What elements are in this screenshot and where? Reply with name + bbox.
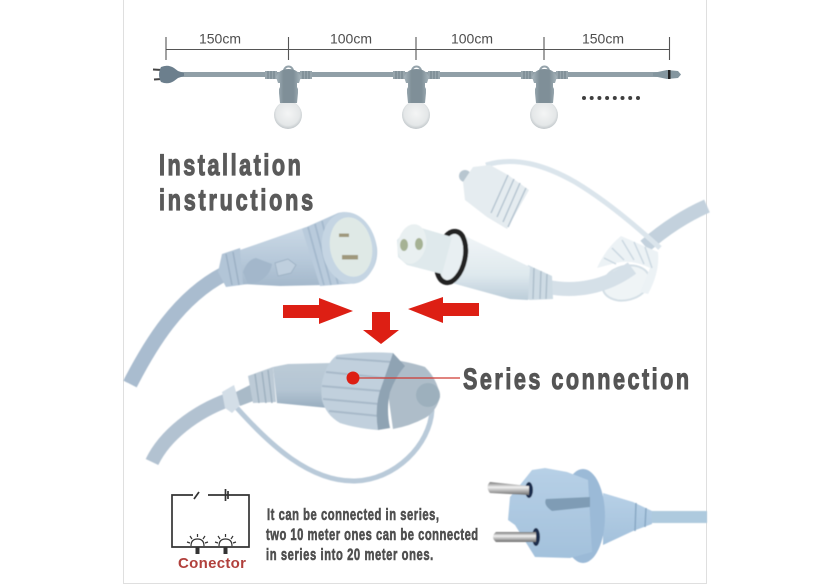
plug head bbox=[397, 225, 452, 274]
dimension lines bbox=[166, 37, 670, 60]
body bbox=[452, 236, 530, 300]
dimension chart bbox=[153, 30, 681, 129]
dimension labels bbox=[199, 30, 624, 46]
pins bbox=[339, 234, 349, 237]
circuit wires bbox=[172, 492, 249, 547]
dimension labels: 100cm bbox=[451, 30, 493, 46]
cable bbox=[548, 268, 632, 289]
description text: It can be connected in series, bbox=[267, 505, 439, 524]
description text: two 10 meter ones can be connected bbox=[266, 525, 478, 544]
cable bbox=[152, 400, 228, 462]
power plug bbox=[488, 468, 707, 563]
plug flange bbox=[561, 469, 605, 563]
latch bbox=[243, 258, 272, 284]
icon: string end cap bbox=[653, 70, 681, 79]
plug grip bbox=[603, 493, 652, 545]
pin 2 bbox=[493, 528, 540, 546]
battery symbol bbox=[226, 489, 228, 501]
arrow: down bbox=[363, 312, 399, 344]
icon: string plug bbox=[153, 66, 184, 83]
strain relief bbox=[218, 248, 248, 287]
ground slot bbox=[545, 497, 590, 511]
image panel bbox=[124, 0, 706, 584]
series-connected connector bbox=[152, 352, 440, 481]
cable ring bbox=[222, 385, 240, 413]
rubber seal bbox=[432, 229, 470, 285]
dimension labels: 100cm bbox=[330, 30, 372, 46]
bulb 3 bbox=[521, 66, 568, 129]
arrow mark bbox=[275, 259, 296, 276]
retaining strap bbox=[486, 161, 660, 248]
arrow: right bbox=[283, 298, 353, 324]
pin holes bbox=[400, 239, 408, 251]
strain relief bbox=[248, 367, 276, 403]
union nut band bbox=[597, 236, 658, 294]
circuit diagram bbox=[172, 489, 249, 572]
dimension labels: 150cm bbox=[199, 30, 241, 46]
back cylinder bbox=[383, 358, 440, 429]
callout dot bbox=[346, 372, 360, 384]
heading: installation instructions bbox=[159, 147, 313, 217]
dimension labels: 150cm bbox=[582, 30, 624, 46]
description text: in series into 20 meter ones. bbox=[266, 545, 433, 564]
bulb 1 bbox=[265, 66, 312, 129]
body bbox=[273, 363, 332, 408]
pin 1 bbox=[488, 482, 533, 498]
continuation dots bbox=[582, 96, 640, 100]
cable bbox=[130, 274, 224, 384]
body bbox=[240, 227, 325, 286]
lamp 2 bbox=[215, 534, 236, 554]
callout label: Series connection bbox=[463, 361, 689, 396]
lamp 1 bbox=[187, 534, 208, 554]
strain relief bbox=[520, 265, 553, 300]
plug face bbox=[508, 468, 592, 558]
end nub bbox=[416, 383, 440, 407]
retaining strap bbox=[237, 408, 432, 481]
circuit label: Conector bbox=[178, 555, 246, 572]
callout: series connection bbox=[346, 361, 689, 396]
socket face bbox=[316, 208, 382, 288]
light string cable bbox=[178, 72, 658, 77]
heading: installation instructions: Installation bbox=[159, 147, 301, 182]
male connector bbox=[130, 208, 382, 384]
cap interior of union nut bbox=[598, 260, 654, 306]
threaded collar bbox=[302, 212, 377, 286]
arrow: left bbox=[408, 297, 479, 323]
heading: installation instructions: instructions bbox=[159, 182, 313, 217]
female connector with cap bbox=[394, 161, 707, 306]
callout leader bbox=[353, 377, 460, 379]
screw cap bbox=[459, 165, 529, 229]
plug cable bbox=[648, 511, 707, 523]
union nut bbox=[321, 352, 403, 430]
description text bbox=[266, 505, 478, 564]
bulb 2 bbox=[393, 66, 440, 129]
